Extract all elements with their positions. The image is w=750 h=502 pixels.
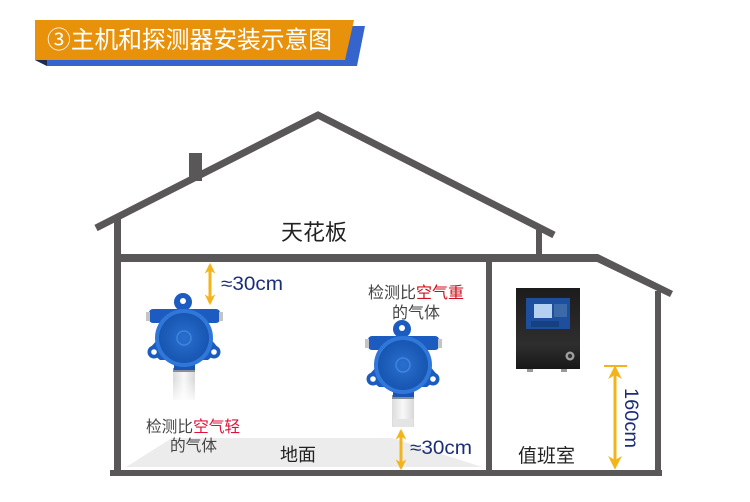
house outline [96, 115, 673, 476]
floor area [126, 438, 482, 467]
arrow: lower 30cm distance [400, 431, 402, 468]
arrow: upper 30cm distance [208, 265, 212, 303]
caption: gas right: 的气体 [392, 304, 440, 322]
detector: heavier-than-air gas [365, 320, 442, 427]
floor label: 地面 [280, 445, 316, 465]
caption: gas left: 的气体 [170, 437, 217, 455]
title banner: ③主机和探测器安装示意图 [47, 27, 332, 54]
detector: lighter-than-air gas [146, 293, 223, 401]
host controller panel [516, 288, 580, 372]
label: upper 30cm: ≈30cm [221, 274, 283, 295]
duty room label: 值班室 [518, 445, 575, 467]
title banner [35, 20, 365, 66]
caption: lighter than air: 检测比空气轻 [146, 418, 240, 436]
arrow: 160cm height [604, 366, 627, 467]
caption: heavier than air: 检测比空气重 [368, 284, 464, 302]
label: 160cm: 160cm [620, 388, 641, 448]
ceiling label: 天花板 [281, 220, 347, 245]
label: lower 30cm: ≈30cm [410, 438, 472, 459]
